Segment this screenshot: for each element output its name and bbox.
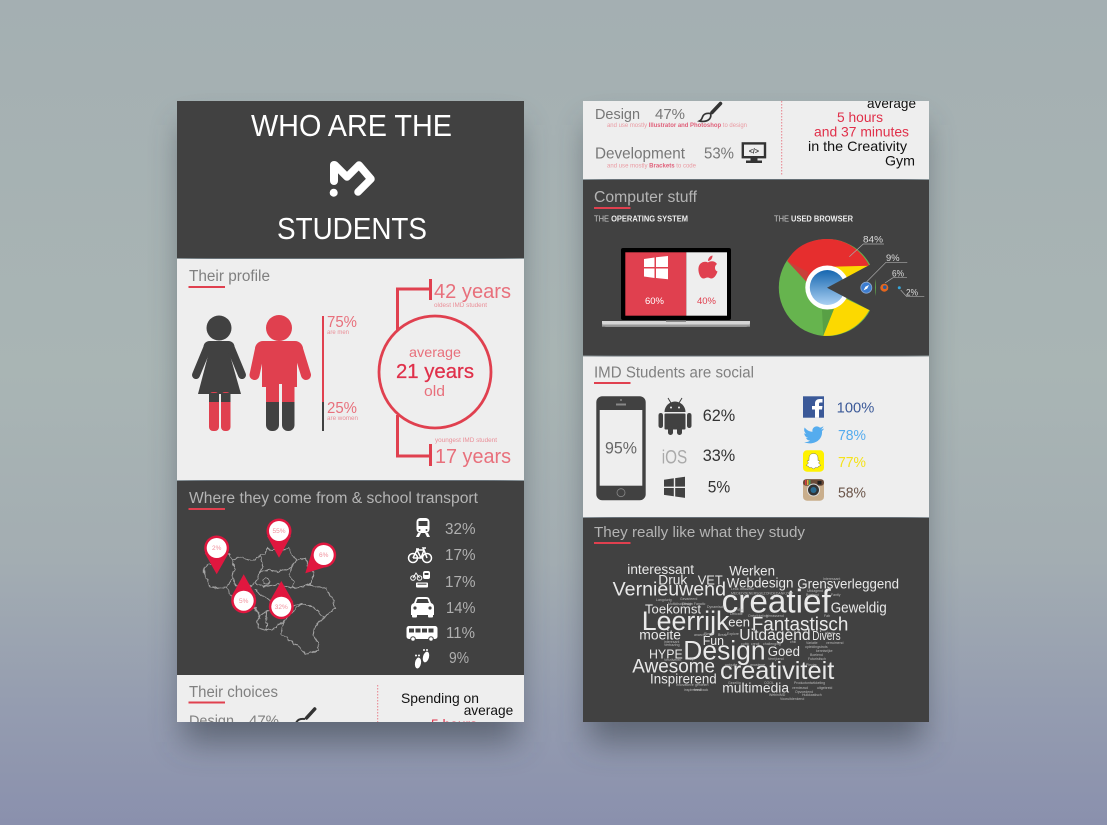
icon: car [411,597,434,618]
word cloud: small words: Vooruitdenkend [780,697,804,701]
word cloud: small words: Multidisciplinair [668,602,693,606]
word cloud: small words: challenging [763,642,781,646]
word cloud: small words: Design Fanatic [682,602,706,606]
panel: right infographic page [583,95,929,722]
icon: android [658,398,692,435]
word cloud: small words: Innovatie [740,587,754,591]
stat: instagram 58%: 58% [838,485,866,501]
word cloud: small words: Boeiend [806,593,819,597]
stat: design: and use mostly Illustrator and Photoshop to design [607,123,747,129]
word cloud: small words [656,577,844,701]
icon: smartphone 95% [596,396,646,500]
label: safari 9% [861,253,907,293]
stat: apple 40%: 40% [697,296,717,307]
stat: design: Design [595,106,640,123]
word cloud: small words: Leuk [731,587,739,591]
heading: origin and transport: Where they come from & school transport [189,490,479,507]
stat: windows 5%: 5% [708,478,730,496]
panel: IMD students are social [583,356,929,517]
chart: laptop operating system split [602,248,750,327]
word cloud: Grensverleggend [797,576,899,591]
icon: IMD logo [330,165,371,197]
word cloud: small words: Top [688,657,694,661]
word cloud: small words: kennisrijke [816,649,833,653]
icon: train [416,518,430,537]
map pin: 55% [266,518,292,558]
stat: development: 53% [704,146,734,163]
map: Belgium provinces [204,548,336,654]
panel: left infographic page [177,101,524,732]
stat: design 47% [190,714,278,722]
text: time in creativity gym: 5 hours [837,109,883,125]
title: who are the: WHO ARE THE [251,108,452,143]
icon: smartphone 95%: 95% [605,440,637,458]
map pin: 55%: 55% [272,528,286,535]
divider: dotted [377,685,379,722]
stat: average age circle: old [424,383,445,400]
word cloud: small words: opleidingstrots [805,645,828,649]
word cloud: small words: COOL [764,681,774,685]
stat: facebook 100%: 100% [837,401,874,417]
word cloud: Leerrijk [642,606,730,636]
text: spending on average: Spending on [401,690,479,706]
word cloud: small words: Break [718,633,727,637]
icon: bicycle, train and bus combination [411,571,430,588]
text: spending on average: 5 hours [431,716,477,732]
word cloud: small words: Hulkkastisch [802,693,822,697]
label: safari 9%: 9% [886,253,900,264]
word cloud: small words: Boeiend [810,653,823,657]
panel: where they come from and school transport [177,481,524,675]
word cloud: small words: Productontwikkeling [794,681,825,685]
word cloud: small words: uniquite [725,663,737,667]
stat: youngest: 17 years [435,446,511,468]
stat: average age circle [379,316,491,428]
word cloud: small words: Opvoedend [795,690,813,694]
word cloud: small words: WebinIMD [769,693,786,697]
word cloud: creativiteit [720,657,834,685]
stat: design 47%: Design [189,712,234,730]
label: chrome 84%: 84% [863,235,884,246]
icon: brush [296,709,315,723]
map pin: 32%: 32% [275,604,288,611]
word cloud: small words: MEDEDOENERSGEZONDEDANKZAM [731,592,793,596]
stat: design 47%: 47% [249,712,279,730]
icon: woman figure [196,316,242,431]
word cloud: small words: innovatieve [676,683,694,687]
word cloud: Toekomst [645,601,701,616]
panel: their profile [177,259,524,480]
chart: age bracket [398,279,430,466]
word cloud: small words: Interessant [823,577,840,581]
word cloud: VET [698,572,723,587]
word cloud: small words: Delicate [730,612,743,616]
label: firefox 6% [880,269,907,292]
subheading: used browser: THE USED BROWSER [774,215,853,224]
word cloud [613,562,899,695]
word cloud: small words: Variatie [806,641,818,645]
stat: development: and use mostly Brackets to code [607,164,697,170]
stat: walking 9%: 9% [449,650,469,667]
stat: oldest: oldest IMD student [434,302,487,309]
stat: android 62%: 62% [703,407,736,425]
heading: their profile: Their profile [189,268,270,285]
stat: snapchat 77%: 77% [838,455,866,471]
map pin: 5% [231,574,256,613]
word cloud: small words: Plezier [806,663,818,667]
text: time in creativity gym: in the Creativity [808,138,907,154]
icon: man figure [254,315,306,431]
icon: monitor code: </> [749,148,759,155]
stat: windows 60%: 60% [645,296,665,307]
map pin: 6%: 6% [319,552,329,559]
stat: bicycle 17%: 17% [445,547,476,564]
heading: computer stuff: Computer stuff [594,189,698,206]
word cloud: small words: Uitdagend [807,589,823,593]
word cloud: small words: nbsoo [825,631,835,635]
word cloud: Inspirerend [650,671,717,686]
label: iOS: iOS [662,447,687,468]
stat: women: are women [327,416,358,422]
icon: bicycle [408,548,432,562]
map pin: 6% [305,542,336,573]
stat: twitter 78%: 78% [838,428,866,444]
word cloud: small words: chill [790,640,796,644]
chart: browser pie as chrome logo [779,239,876,336]
word cloud: small words: genieten [695,683,708,687]
word cloud: een [728,615,750,630]
word cloud: small words: Langdurig [656,598,672,602]
label: firefox 6%: 6% [892,269,904,280]
icon: bus [406,626,438,641]
panel: computer stuff [583,180,929,356]
label: chrome 84% [849,235,884,257]
panel: their choices [177,675,524,722]
stat: development [595,146,734,170]
word cloud: small words: Explore [727,632,739,636]
word cloud: HYPE [649,646,683,661]
word cloud: Design [683,635,766,665]
word cloud: small words: Gevarieerd [680,597,697,601]
word cloud: small words: Verzilveren [664,658,681,662]
stat: women: 25% [327,400,357,417]
stat: bus 11%: 11% [446,625,475,642]
stat: average age circle: average [409,344,461,360]
word cloud: small words: interesant [664,640,679,644]
stat: iOS 33%: 33% [703,447,736,465]
stat: train 32%: 32% [445,521,476,538]
stat: men: 75% [327,314,357,331]
word cloud: small words: Gezellig [728,681,741,685]
word cloud: small words: anasteme [750,663,765,667]
word cloud: Werken [729,564,775,579]
chart: gender split bar [322,316,324,431]
word cloud: small words: Dynamisch [707,605,724,609]
word cloud: interessant [627,562,694,577]
word cloud: small words: Vlot [737,608,743,612]
word cloud: small words: anarchy [694,633,707,637]
icon: snapchat [803,450,824,472]
stat: design: 47% [655,106,685,123]
stat: car 14%: 14% [446,600,476,617]
word cloud: Fantastisch [752,615,848,636]
word cloud: Uitdagend [739,627,811,644]
word cloud: moeite [639,628,681,643]
word cloud: small words: creak [751,642,760,646]
title: students: STUDENTS [277,211,427,246]
word cloud: Druk [658,572,688,587]
word cloud: small words: inspirerend [684,688,701,692]
panel: they really like what they study [583,518,929,722]
icon: apple logo [698,256,718,278]
icon: windows logo [644,256,668,279]
stat: combination 17%: 17% [445,574,476,591]
stat: design [595,106,747,129]
word cloud: Awesome [632,657,715,678]
label: other 2% [898,286,924,299]
word cloud: Vernieuwend [613,580,726,601]
stat: development: Development [595,146,686,163]
icon: twitter [804,426,824,443]
word cloud: small words: Ontwikkeling [748,614,768,618]
word cloud: Divers [812,628,841,643]
word cloud: small words: Plezier [704,632,716,636]
stat: youngest: youngest IMD student [435,437,497,444]
stat: average age circle: 21 years [396,360,474,383]
subheading: operating system: THE OPERATING SYSTEM [594,215,688,224]
divider: dotted [781,101,783,175]
word cloud: small words: Fab [824,614,830,618]
word cloud: small words: Verrassend [766,614,784,618]
word cloud: small words: Verrijkend [768,657,784,661]
word cloud: small words: verruimend [826,641,844,645]
text: time in creativity gym [808,95,916,169]
text: time in creativity gym: Gym [885,153,915,169]
word cloud: Webdesign [727,576,793,591]
icon: footprints [414,649,430,669]
text: spending on average: average [464,702,513,718]
map pin: 2%: 2% [212,545,222,552]
word cloud: multimedia [722,680,789,695]
heading: their choices: Their choices [189,684,278,701]
word cloud: Geweldig [831,600,887,616]
panel: choices continued [583,95,929,179]
map pin: 2% [204,536,229,574]
icon: facebook [803,396,824,418]
heading: social: IMD Students are social [594,365,754,382]
icon: instagram [803,479,824,501]
word cloud: small words: uitgebreid [817,686,832,690]
heading: study: They really like what they study [594,524,805,541]
stat: oldest: 42 years [434,281,511,303]
label: other 2%: 2% [906,288,918,299]
text: time in creativity gym: average [867,95,916,111]
text: spending on average [401,690,513,732]
word cloud: small words: Verbazing [664,643,680,647]
word cloud: small words: cubic [741,642,749,646]
panel: header [177,101,524,258]
icon: brush [700,104,720,121]
word cloud: small words: vernieuwd [792,686,808,690]
word cloud: Goed [768,644,800,659]
map pin: 32% [269,581,294,619]
stat: men: are men [327,330,349,336]
word cloud: small words: feedback [694,688,708,692]
icon: monitor code [743,143,765,163]
word cloud: creatief [722,582,832,619]
text: time in creativity gym: and 37 minutes [814,124,909,140]
word cloud: Fun [703,634,724,648]
word cloud: small words: Futuristisch [808,657,826,661]
icon: windows [664,477,685,498]
word cloud: small words: Fantly [831,593,841,597]
map pin: 5%: 5% [239,598,249,605]
